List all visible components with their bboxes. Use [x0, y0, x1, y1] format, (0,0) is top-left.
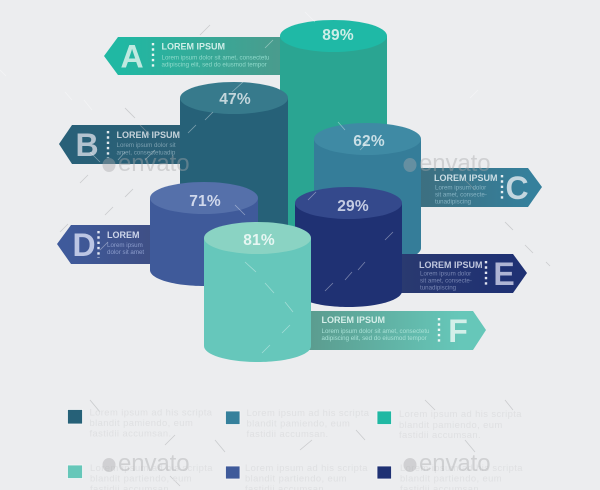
- legend: [68, 406, 523, 490]
- callout B: [59, 125, 182, 164]
- callout C: [419, 168, 542, 207]
- cylinder D 71%: [150, 182, 258, 286]
- legend item 5: blandit partiendo, eum: [245, 472, 347, 484]
- callout E: tunadipiscing: [420, 284, 457, 292]
- legend item 2: [226, 407, 370, 439]
- callout F: Lorem ipsum dolor sit amet, consectetu: [322, 328, 430, 335]
- callout B: LOREM IPSUM: [116, 130, 180, 140]
- callout B: amet, consectetuadip: [116, 150, 176, 156]
- callout B: B: [75, 127, 99, 163]
- callout E: [398, 254, 527, 293]
- legend item 4: blandit partiendo, eum: [90, 472, 192, 484]
- legend item 1: Lorem ipsum ad his scripta: [90, 406, 213, 418]
- cylinder E 29%: [295, 187, 402, 307]
- watermark bottom left: envato: [118, 450, 189, 477]
- cylinder C 62%: 62%: [353, 133, 385, 150]
- legend item 1: blandit pamiendo, eum: [90, 417, 193, 428]
- legend item 3: Lorem ipsum ad his scripta: [399, 408, 522, 419]
- cylinder F 81%: 81%: [243, 232, 275, 249]
- callout E: sit amet, consecte-: [420, 278, 472, 284]
- callout E: E: [493, 256, 515, 292]
- callout A: A: [120, 38, 144, 74]
- watermark bottom right: envato: [419, 450, 490, 477]
- legend item 6: Lorem ipsum ad his scripta: [400, 462, 523, 473]
- cylinder B 47%: 47%: [219, 91, 251, 108]
- callout A: [104, 37, 282, 75]
- cylinder A 89%: [280, 20, 387, 245]
- callout D: dolor sit amet: [107, 249, 144, 256]
- legend item 1: [68, 406, 213, 438]
- legend item 2: fastidii accumsan.: [246, 428, 329, 439]
- watermark top left: envato: [118, 150, 189, 177]
- callout A: adipiscing elit, sed do eiusmod tempor: [162, 62, 267, 68]
- callout A: LOREM IPSUM: [162, 42, 225, 52]
- legend item 3: fastidii accumsan.: [399, 429, 481, 440]
- legend item 3: blandit pamiendo, eum: [399, 419, 503, 430]
- callout C: tunadipiscing: [435, 198, 472, 206]
- callout D: LOREM: [107, 230, 140, 240]
- watermark top right: envato: [419, 150, 490, 177]
- callout E: LOREM IPSUM: [419, 260, 483, 270]
- legend item 2: blandit pamiendo, eum: [246, 418, 350, 428]
- cylinder B 47%: [180, 82, 288, 240]
- cylinder A 89%: 89%: [322, 27, 354, 44]
- callout F: adipiscing elit, sed do eiusmod tempor: [322, 335, 427, 342]
- legend item 4: Lorem ipsum ad his scripta: [90, 462, 213, 473]
- cylinder F 81%: [204, 222, 311, 362]
- callout C: C: [505, 170, 529, 206]
- legend item 6: blandit partiendo, eum: [400, 472, 502, 484]
- callout D: D: [72, 227, 96, 263]
- callout C: sit amet, consecte-: [435, 192, 487, 198]
- callout A: Lorem ipsum dolor sit amet, consectetu: [162, 54, 270, 62]
- callout E: Lorem ipsum dolor: [420, 270, 471, 278]
- callout C: LOREM IPSUM: [434, 173, 498, 183]
- callout D: [57, 225, 152, 264]
- legend item 1: fastidii accumsan.: [90, 428, 172, 438]
- legend item 5: [226, 462, 368, 490]
- cylinder D 71%: 71%: [189, 193, 221, 210]
- legend item 2: Lorem ipsum ad his scripta: [246, 407, 370, 418]
- callout B: Lorem ipsum dolor sit: [116, 142, 176, 149]
- cylinder C 62%: [314, 123, 421, 264]
- callout C: Lorem ipsum dolor: [435, 184, 486, 192]
- legend item 5: Lorem ipsum ad his scripta: [245, 462, 368, 473]
- callout F: LOREM IPSUM: [322, 315, 385, 325]
- cylinder E 29%: 29%: [337, 198, 369, 215]
- callout F: F: [448, 313, 468, 349]
- legend item 3: [377, 408, 522, 440]
- legend item 4: [68, 462, 213, 490]
- callout D: Lorem ipsum: [107, 242, 143, 249]
- callout F: [309, 311, 486, 350]
- legend item 6: [377, 462, 523, 490]
